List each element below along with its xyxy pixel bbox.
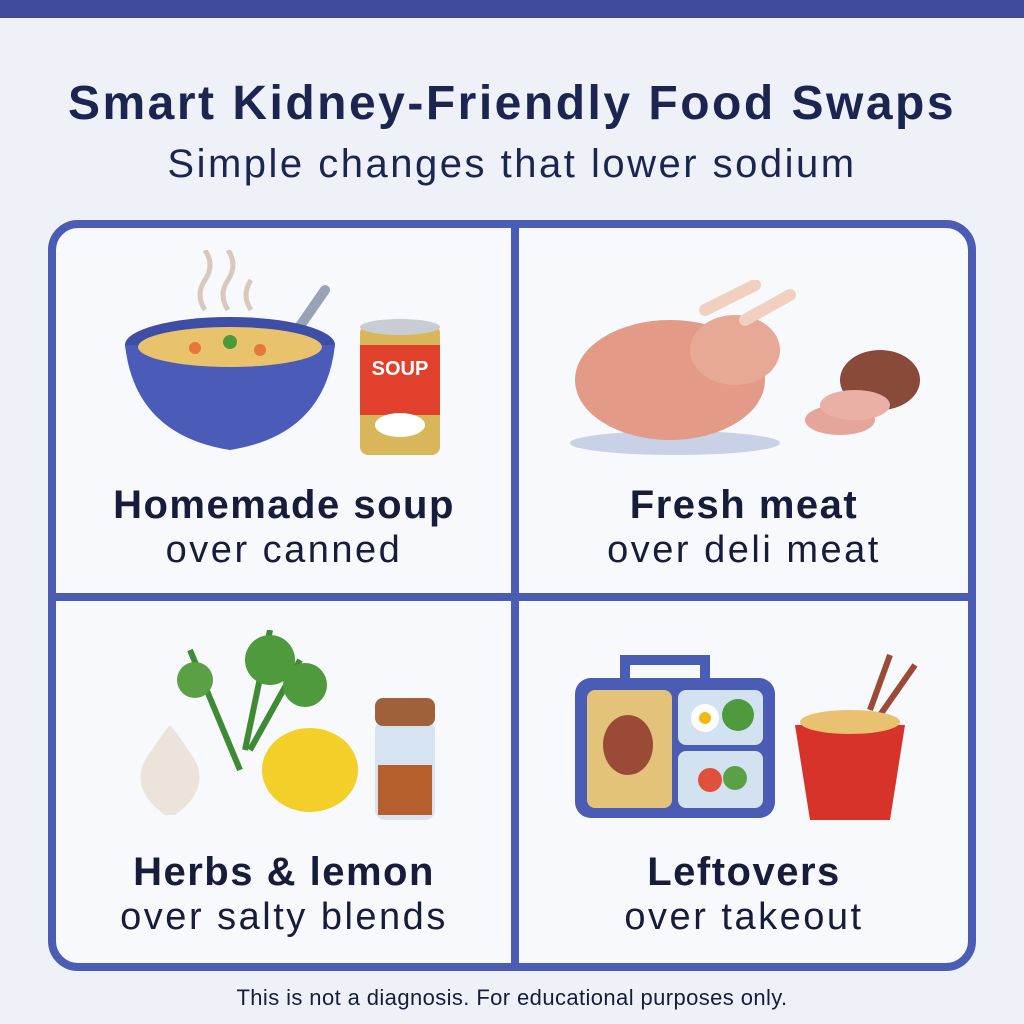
panel: swaps grid <box>48 220 976 971</box>
text: leftovers <box>624 850 864 938</box>
icon: lunchbox and takeout <box>575 654 918 820</box>
text: fresh meat: Fresh meat <box>630 483 858 527</box>
vertical divider <box>511 228 519 963</box>
horizontal divider <box>56 593 968 601</box>
icon: soup bowl and can <box>125 250 440 455</box>
text: herbs & lemon <box>120 850 448 938</box>
text: fresh meat <box>607 483 881 571</box>
icon: herbs lemon garlic spice <box>140 630 435 820</box>
text: herbs & lemon: over salty blends <box>120 896 448 938</box>
text: homemade soup <box>113 483 455 571</box>
text: fresh meat: over deli meat <box>607 529 881 571</box>
top bar <box>0 0 1024 18</box>
icon: soup bowl and can: SOUP <box>372 358 428 380</box>
text: herbs & lemon: Herbs & lemon <box>133 850 435 894</box>
footer disclaimer: This is not a diagnosis. For educational purposes only. <box>236 985 788 1010</box>
text: homemade soup: over canned <box>166 529 402 571</box>
text: homemade soup: Homemade soup <box>113 483 455 527</box>
text: leftovers: over takeout <box>624 896 864 938</box>
title: Smart Kidney-Friendly Food Swaps <box>68 77 956 130</box>
icon: roast chicken and deli meat <box>570 280 920 455</box>
subtitle: Simple changes that lower sodium <box>167 142 857 186</box>
text: leftovers: Leftovers <box>647 850 841 894</box>
